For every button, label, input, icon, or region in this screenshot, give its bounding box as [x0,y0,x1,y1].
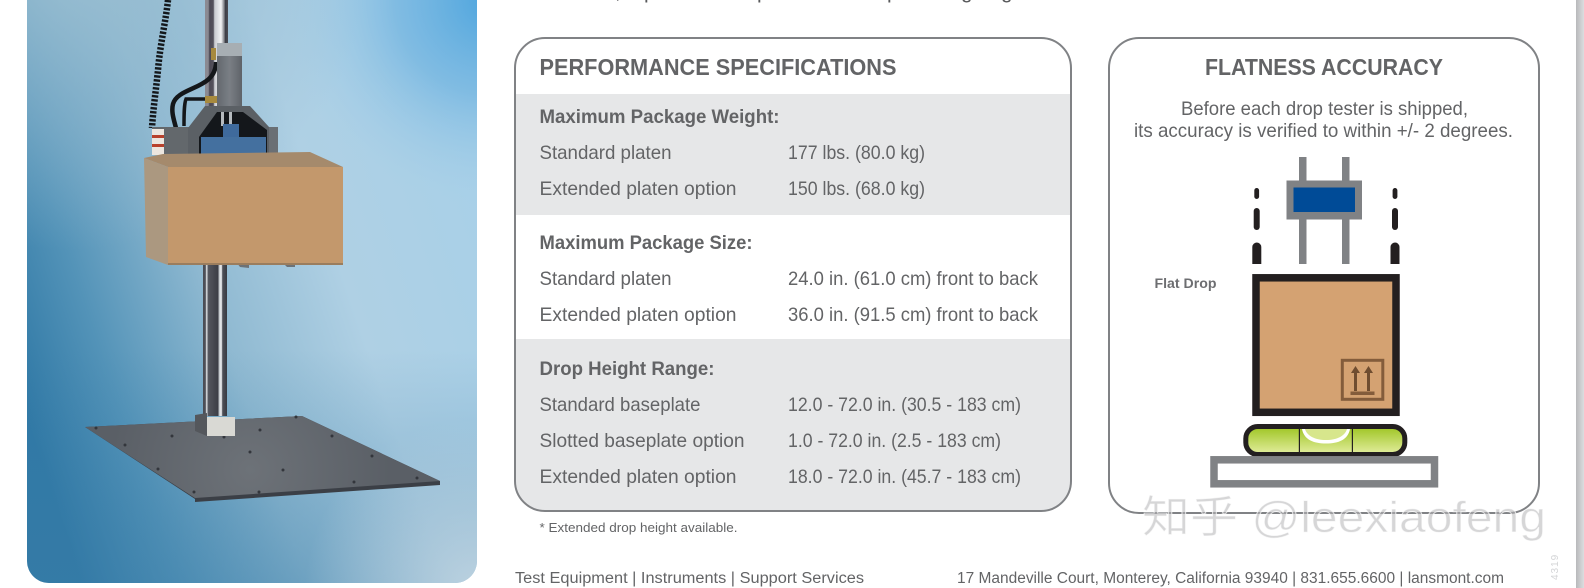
panel: performance specifications [515,38,1071,512]
right carriage tab [269,127,278,153]
carriage rods [221,112,232,126]
panel: product photo of drop tester [27,0,477,584]
left carriage housing [152,127,189,154]
group: maximum package weight: Maximum Package Weight: [540,106,780,128]
carriage arch [188,106,269,155]
icon: package [1256,278,1396,412]
page edge strip [1576,0,1584,588]
heading: performance specifications: PERFORMANCE SPECIFICATIONS [540,54,896,80]
brake cylinder [217,43,242,108]
group: maximum package weight: Standard platen [540,142,672,164]
group: drop height range: Slotted baseplate option [540,430,744,452]
group: drop height range: Extended platen option [540,466,736,488]
brass fittings [205,48,218,103]
group: maximum package weight [540,106,925,200]
icon: spirit level [1246,426,1405,454]
group: drop height range: 18.0 - 72.0 in. (45.7 - 183 cm) [788,466,1021,488]
coiled cable [152,0,168,128]
icon: baseplate [1214,460,1434,484]
blue platen block [223,124,239,137]
flatness description: Before each drop tester is shipped, [1181,98,1468,120]
group: maximum package size: 24.0 in. (61.0 cm) front to back [788,268,1038,290]
cardboard box [144,152,343,265]
upper guide column [205,0,228,110]
group: drop height range: Standard baseplate [540,394,700,416]
footer: left tagline: Test Equipment | Instruments | Support Services [515,570,864,587]
icon: this side up mark [1342,360,1383,399]
group: maximum package size: Maximum Package Size: [540,232,752,254]
warning sticker [152,129,164,155]
group: drop height range: Drop Height Range: [540,358,714,380]
group: maximum package size: Standard platen [540,268,672,290]
group: maximum package size: 36.0 in. (91.5 cm) front to back [788,304,1038,326]
watermark: 知乎 @leexiaofeng [1142,493,1546,542]
flatness description [1134,98,1513,142]
column base block [195,413,235,436]
group: maximum package weight: 177 lbs. (80.0 kg) [788,142,925,164]
group: drop height range: 12.0 - 72.0 in. (30.5 - 183 cm) [788,394,1021,416]
hydraulic hose [172,62,216,128]
flat drop label: Flat Drop [1154,275,1216,291]
carriage brackets under box [238,265,295,268]
footer: contact details: 17 Mandeville Court, Monterey, California 93940 | 831.655.6600 | lansmont.com [957,570,1504,587]
carriage interior [199,112,267,155]
icon: right motion dashes [1390,188,1400,264]
table shading bands [515,94,1071,512]
baseplate [85,416,440,502]
group: maximum package weight: Extended platen option [540,178,736,200]
group: maximum package size [540,232,1038,326]
document code: 4319 [1550,554,1561,580]
group: drop height range: 1.0 - 72.0 in. (2.5 - 183 cm) [788,430,1001,452]
blue platen [201,137,266,154]
group: drop height range [540,358,1021,488]
icon: drop carriage [1286,157,1362,264]
footnote: * Extended drop height available. [540,520,738,535]
icon: left motion dashes [1252,188,1261,264]
flatness description: its accuracy is verified to within +/- 2 degrees. [1134,120,1513,142]
group: maximum package size: Extended platen option [540,304,736,326]
heading: flatness accuracy: FLATNESS ACCURACY [1205,54,1443,80]
group: maximum package weight: 150 lbs. (68.0 kg) [788,178,925,200]
panel: flatness accuracy [1109,38,1539,513]
lower guide column [203,264,227,416]
